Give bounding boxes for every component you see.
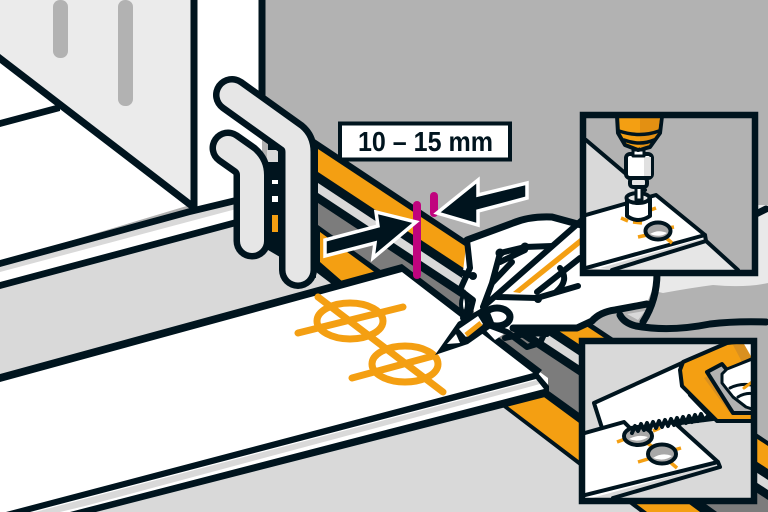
fingers: [460, 240, 578, 347]
drill body: [617, 116, 662, 150]
handle: rear: [228, 148, 252, 241]
rail: upper orange band: [318, 149, 768, 469]
pencil tip: [435, 305, 495, 355]
drilled hole: [646, 222, 670, 240]
pencil shaft: [483, 220, 582, 307]
door frame and door panel: [0, 0, 266, 212]
handle: front: [232, 95, 298, 270]
upper hole: [624, 427, 652, 445]
plank: [0, 264, 549, 512]
rail: lower orange band: [320, 232, 700, 512]
orange marks: [621, 208, 674, 243]
white floor under door: [0, 60, 190, 262]
drilled plank: [586, 195, 706, 270]
magenta measurement lines: [417, 196, 434, 275]
orange marks: [617, 428, 681, 468]
sawn plank: [585, 422, 720, 498]
lower hole: [648, 444, 676, 464]
arrow pointing left: [437, 180, 527, 225]
arrow pointing right: [325, 212, 416, 258]
rail: light grey band: [318, 183, 768, 490]
orange hole markings: [298, 297, 443, 392]
measurement label: 10 – 15 mm: [358, 126, 493, 157]
threshold strip: [0, 196, 240, 289]
rail: dark grey band: [318, 203, 768, 512]
small floor patch beside handle: [316, 272, 333, 290]
drill bit: [626, 150, 652, 220]
saw handle: [680, 340, 755, 421]
hand holding pencil: [460, 215, 660, 347]
floor: [0, 222, 640, 512]
sleeve: [620, 200, 768, 330]
inset panel: sawing: [582, 340, 755, 501]
wall rail: black base: [268, 108, 768, 512]
rail fragments between handles: [267, 150, 278, 232]
inset panel: drilling: [583, 115, 755, 273]
saw blade: [594, 363, 713, 429]
saw teeth: [632, 414, 710, 433]
